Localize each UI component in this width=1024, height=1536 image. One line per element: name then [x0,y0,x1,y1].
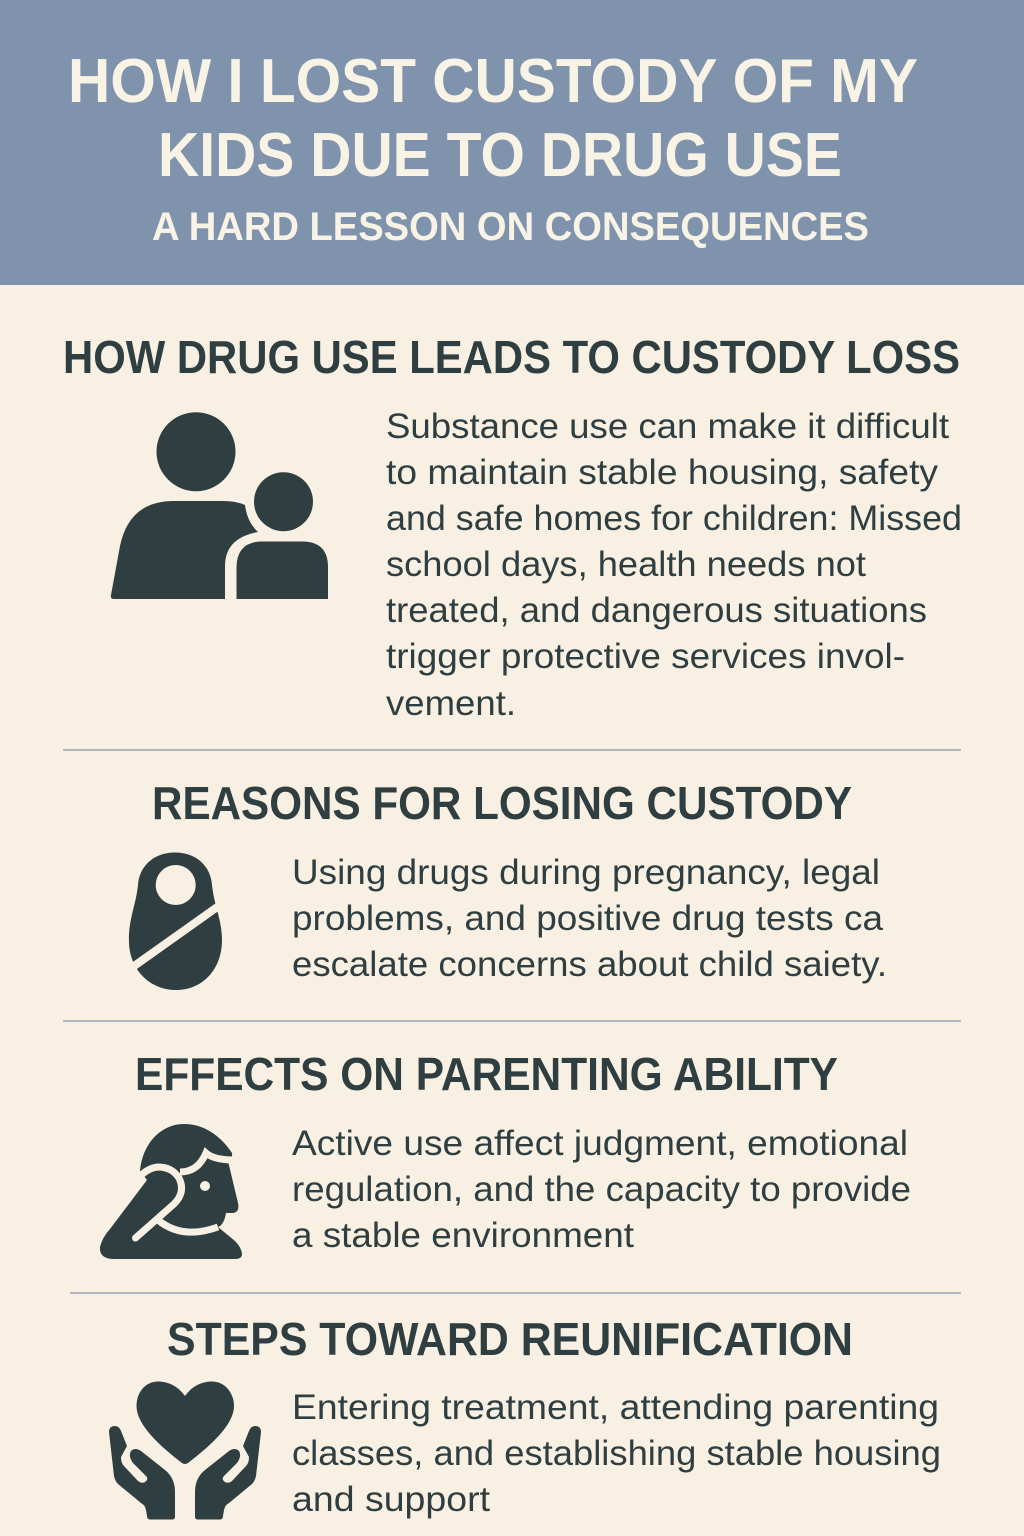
header banner [0,0,1024,285]
panel: effects on parenting ability [100,1048,911,1259]
body text [292,1123,911,1255]
title: HOW I LOST CUSTODY OF MY [68,47,918,116]
body text: and safe homes for children: Missed [386,498,962,538]
subtitle: A HARD LESSON ON CONSEQUENCES [152,205,869,249]
heading: reasons for losing custody: REASONS FOR LOSING CUSTODY [152,777,852,829]
icon: parent and child [111,412,328,599]
body text: treated, and dangerous situations [386,590,927,630]
body text: school days, health needs not [386,544,866,584]
panel: steps toward reunification [109,1313,941,1520]
body text [292,1387,941,1519]
body text: a stable environment [292,1215,634,1255]
title [68,47,918,190]
body text: Using drugs during pregnancy, legal [292,852,880,892]
body text: classes, and establishing stable housing [292,1433,941,1473]
body text [292,852,887,984]
body text: escalate concerns about child saiety. [292,944,887,984]
body text: and support [292,1479,490,1519]
heading: effects on parenting ability: EFFECTS ON PARENTING ABILITY [135,1048,838,1100]
panel: how drug use leads to custody loss [63,331,962,723]
heading: steps toward reunification: STEPS TOWARD REUNIFICATION [167,1313,853,1365]
body text: to maintain stable housing, safety [386,452,938,492]
body text: regulation, and the capacity to provide [292,1169,911,1209]
body text: Active use affect judgment, emotional [292,1123,908,1163]
body text [386,406,962,723]
body text: trigger protective services invol- [386,636,905,676]
heading: how drug use leads to custody loss: HOW DRUG USE LEADS TO CUSTODY LOSS [63,331,960,383]
body text: Entering treatment, attending parenting [292,1387,939,1427]
title: KIDS DUE TO DRUG USE [158,121,842,190]
icon: parent with head in hand [100,1124,242,1259]
body text: vement. [386,683,516,723]
icon: hands holding heart [109,1382,261,1520]
body text: Substance use can make it difficult [386,406,949,446]
body text: problems, and positive drug tests ca [292,898,883,938]
panel: reasons for losing custody [125,777,887,990]
icon: swaddled baby [125,852,225,990]
